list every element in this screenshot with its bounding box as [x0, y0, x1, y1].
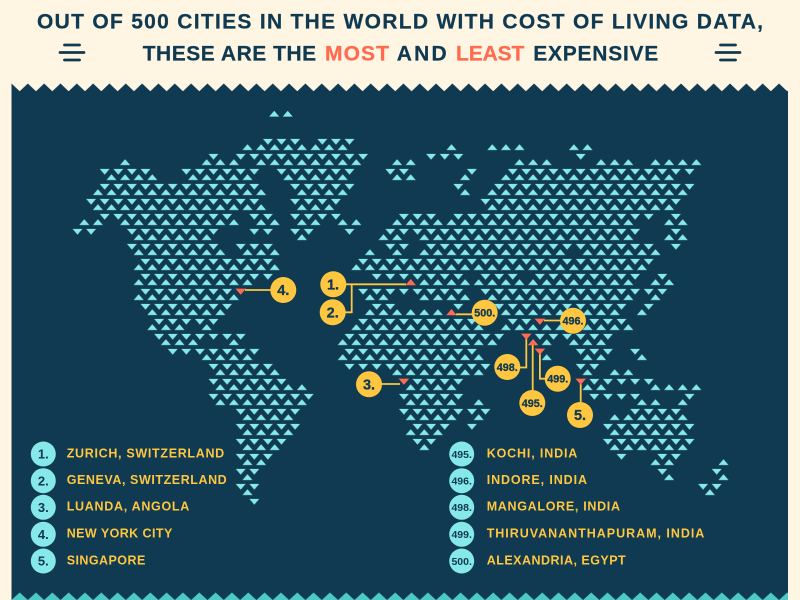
badge 2	[320, 299, 346, 325]
legend item 499: 499.	[451, 529, 472, 541]
legend item 4	[31, 522, 173, 547]
badge 496	[560, 308, 586, 334]
legend item 1	[31, 442, 224, 466]
badge 499	[545, 366, 571, 392]
badge 1: 1.	[327, 277, 339, 293]
legend item 496: INDORE, INDIA	[487, 473, 587, 487]
badge 4: 4.	[277, 283, 289, 299]
icon: left menu lines	[60, 45, 84, 60]
legend item 2	[31, 468, 227, 493]
map: top islands	[269, 111, 293, 117]
legend item 498	[449, 495, 620, 520]
badge 496: 496.	[562, 316, 584, 328]
badge 499: 499.	[547, 374, 568, 386]
legend item 495	[449, 442, 577, 466]
legend item 4: NEW YORK CITY	[67, 526, 173, 540]
title: EXPENSIVE	[533, 43, 658, 66]
legend item 2: 2.	[38, 473, 49, 488]
legend: least expensive cities	[449, 442, 704, 574]
badge 4	[270, 277, 296, 303]
badge 5: 5.	[574, 408, 586, 424]
map: up-pointing triangle rows	[78, 144, 730, 497]
badge 2: 2.	[327, 305, 339, 321]
legend item 496: 496.	[451, 476, 472, 488]
legend item 1: 1.	[38, 447, 49, 462]
title: MOST	[325, 43, 389, 66]
legend item 3: 3.	[38, 500, 49, 515]
badge 495: 495.	[522, 398, 543, 410]
legend item 496	[449, 468, 587, 493]
badge 5	[567, 402, 593, 428]
legend item 500	[449, 548, 626, 574]
legend item 495: 495.	[451, 449, 472, 461]
legend item 499	[449, 522, 704, 547]
legend item 4: 4.	[38, 527, 49, 542]
city markers	[235, 279, 586, 385]
legend item 495: KOCHI, INDIA	[487, 446, 577, 460]
legend item 3	[31, 495, 189, 520]
icon: right menu lines	[716, 45, 740, 60]
badge 498: 498.	[497, 362, 518, 374]
connector lines	[245, 284, 581, 415]
badge 495	[519, 390, 545, 416]
legend: most expensive cities	[31, 442, 227, 574]
map: down-pointing triangle rows	[71, 139, 723, 506]
legend item 500: 500.	[451, 556, 472, 568]
title	[37, 10, 763, 66]
title: AND	[397, 43, 447, 66]
legend item 1: ZURICH, SWITZERLAND	[67, 446, 224, 460]
world map of triangles	[71, 111, 730, 506]
map badges	[270, 271, 593, 428]
badge 500: 500.	[474, 308, 495, 320]
title: OUT OF 500 CITIES IN THE WORLD WITH COST OF LIVING DATA,	[37, 10, 763, 34]
legend item 2: GENEVA, SWITZERLAND	[67, 473, 227, 487]
legend item 498: 498.	[451, 502, 472, 514]
legend item 498: MANGALORE, INDIA	[487, 500, 620, 514]
badge 500	[472, 300, 498, 326]
badge 1	[320, 271, 346, 297]
badge 3: 3.	[363, 377, 375, 393]
legend item 500: ALEXANDRIA, EGYPT	[487, 554, 626, 568]
legend item 499: THIRUVANANTHAPURAM, INDIA	[487, 526, 704, 540]
title: LEAST	[456, 43, 524, 66]
legend item 3: LUANDA, ANGOLA	[67, 500, 189, 514]
badge 3	[356, 371, 382, 397]
badge 498	[494, 354, 520, 380]
legend item 5	[31, 548, 145, 574]
legend item 5: 5.	[38, 554, 49, 569]
legend item 5: SINGAPORE	[67, 554, 145, 568]
title: THESE ARE THE	[143, 43, 316, 66]
